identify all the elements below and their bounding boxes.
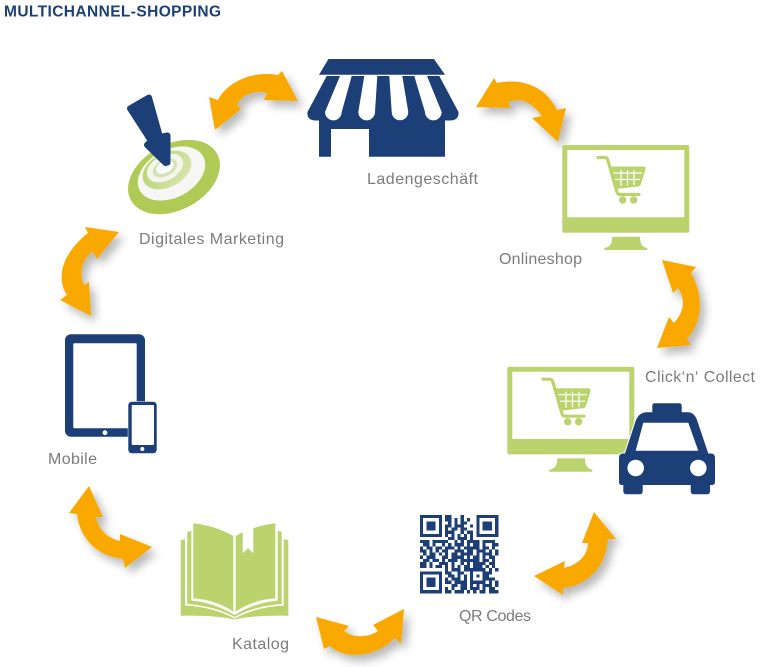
taxi body [619,403,715,494]
monitor stand [549,458,592,472]
label: online shop: Onlineshop [499,251,582,268]
arrow: digital marketing to store [209,71,298,130]
label: QR codes: QR Codes [459,608,531,625]
title: MULTICHANNEL-SHOPPING [4,4,221,20]
label: click and collect: Click‘n‘ Collect [645,369,756,386]
target middle ring [136,143,198,197]
arrow: store to online shop [476,78,566,142]
right page with bookmark [236,523,275,612]
icon: open book catalogue [181,523,288,620]
phone button [140,447,144,451]
label: mobile: Mobile [48,451,97,468]
icon: tablet and phone [65,334,157,453]
target centre [154,157,176,177]
arrow: catalogue to mobile [69,486,152,568]
target white ring [128,135,215,212]
awning white stripes [325,76,442,120]
page stack middle [187,531,282,617]
target outer ring [115,125,233,229]
target inner ring [150,155,180,181]
taxi headlights [627,460,644,476]
taxi windscreen [636,423,698,451]
arrow: mobile to digital marketing [60,227,119,316]
arrow: online shop to click and collect [657,260,700,348]
monitor frame [507,367,634,454]
label: catalogue: Katalog [232,636,289,653]
store awning [307,76,459,120]
icon: taxi [619,403,715,494]
arrow: click and collect to QR codes [534,512,616,595]
label: store: Ladengeschäft [367,171,479,188]
store building with door [319,113,445,157]
icon: click and collect monitor [507,367,634,472]
target inner white [142,148,188,188]
phone screen [132,405,154,445]
icon: target with arrow [115,98,233,229]
page stack outer [181,539,288,620]
label: digital marketing: Digitales Marketing [139,231,284,248]
icon: online shop monitor [562,145,689,250]
monitor frame [562,145,689,233]
monitor stand [604,237,647,250]
store roof [319,59,445,75]
tablet [65,334,145,437]
tablet button [103,430,107,435]
shopping cart [598,158,646,204]
icon: store [307,59,459,157]
shopping cart [543,379,591,425]
tablet screen [73,343,137,428]
icon: QR code [420,517,498,592]
arrow: QR codes to catalogue [316,609,404,655]
navy pointer arrow [130,98,168,163]
phone [128,402,157,453]
left page [193,523,233,612]
